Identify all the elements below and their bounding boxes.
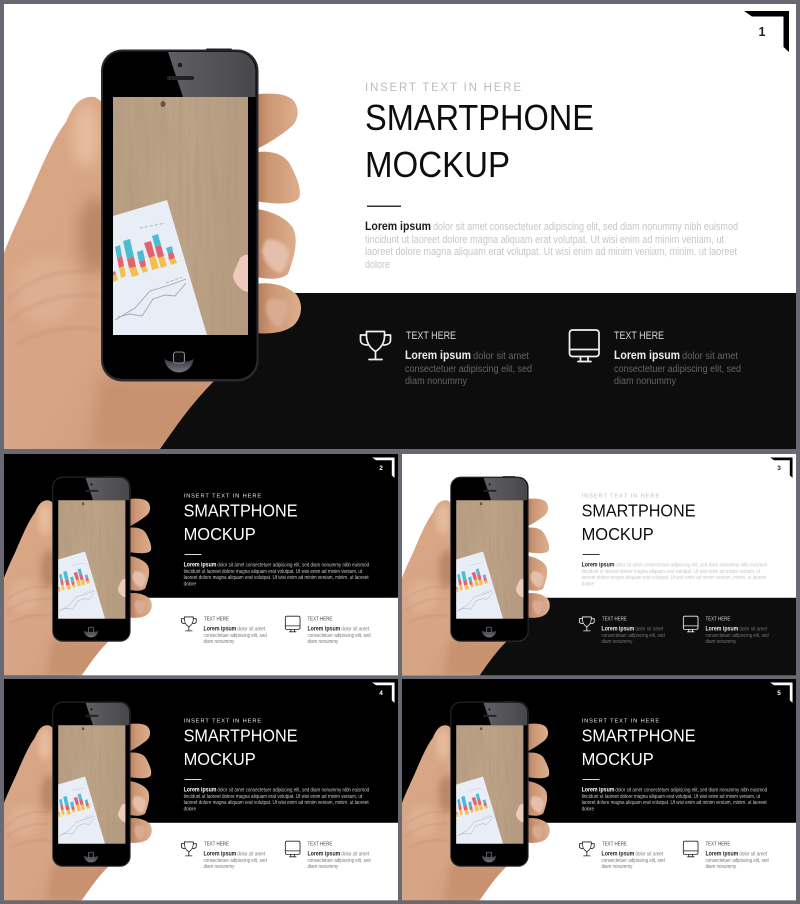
icon: trophy — [360, 332, 390, 360]
body text — [365, 219, 738, 271]
feature text 2 — [614, 330, 741, 387]
panel: slide 2 — [4, 454, 398, 675]
body text: tincidunt ut laoreet dolore magna aliquam erat volutpat. Ut wisi enim ad minim veniam, ut — [582, 569, 761, 575]
body text: laoreet dolore magna aliquam erat volutpat. Ut wisi enim ad minim veniam, minim. ut laoreet — [184, 800, 369, 806]
title: MOCKUP — [184, 749, 256, 769]
body text: laoreet dolore magna aliquam erat volutpat. Ut wisi enim ad minim veniam, minim. ut laoreet — [365, 246, 737, 258]
image: hand holding smartphone — [402, 701, 550, 900]
feature text 1: Lorem ipsum — [203, 627, 236, 633]
feature text 1: TEXT HERE — [406, 330, 456, 342]
feature text 2: consectetuer adipiscing elit, sed — [705, 633, 769, 639]
body text: dolor sit amet consectetuer adipiscing elit, sed diam nonummy nibh euismod — [433, 221, 738, 233]
body text: tincidunt ut laoreet dolore magna aliquam erat volutpat. Ut wisi enim ad minim veniam, ut — [184, 569, 363, 575]
panel: slide 4 — [4, 679, 398, 900]
body text: dolore — [184, 806, 196, 812]
feature text 1 — [601, 617, 665, 645]
page number corner — [372, 682, 395, 703]
divider — [583, 778, 600, 781]
body text: dolore — [365, 259, 390, 271]
feature text 1: TEXT HERE — [204, 617, 229, 623]
page number corner — [770, 457, 793, 478]
dark band — [150, 293, 796, 449]
body text: Lorem ipsum — [582, 787, 614, 793]
feature text 1: diam nonummy — [601, 864, 633, 870]
feature text 1: dolor sit amet — [635, 627, 664, 633]
page number corner: 4 — [379, 690, 383, 697]
body text: dolor sit amet consectetuer adipiscing elit, sed diam nonummy nibh euismod — [217, 787, 369, 793]
feature text 1: diam nonummy — [405, 375, 468, 387]
feature text 1: Lorem ipsum — [203, 852, 236, 858]
panel: slide 1 — [4, 4, 796, 449]
feature text 2: Lorem ipsum — [705, 852, 738, 858]
body text — [184, 562, 369, 587]
feature text 1: diam nonummy — [601, 639, 633, 645]
title: MOCKUP — [365, 144, 510, 185]
image: hand holding smartphone — [4, 476, 152, 675]
body text: dolor sit amet consectetuer adipiscing elit, sed diam nonummy nibh euismod — [615, 787, 767, 793]
light band — [77, 598, 398, 675]
page number corner: 1 — [759, 25, 766, 39]
icon: monitor — [683, 616, 698, 632]
body text: Lorem ipsum — [184, 562, 216, 568]
feature text 2: diam nonummy — [705, 864, 737, 870]
page number corner — [372, 457, 395, 478]
feature text 2: dolor sit amet — [341, 852, 370, 858]
light band — [77, 823, 398, 900]
body text: dolore — [582, 581, 594, 587]
icon: monitor — [683, 841, 698, 857]
title: MOCKUP — [582, 749, 654, 769]
title: SMARTPHONE — [582, 726, 696, 746]
title: MOCKUP — [582, 524, 654, 544]
feature text 1: consectetuer adipiscing elit, sed — [405, 363, 532, 375]
panel: slide 5 — [402, 679, 796, 900]
feature text 1: diam nonummy — [203, 639, 235, 645]
feature text 1: dolor sit amet — [237, 852, 266, 858]
divider — [583, 553, 600, 556]
icon: trophy — [181, 617, 196, 631]
body text: Lorem ipsum — [365, 219, 431, 233]
page number corner: 3 — [777, 465, 781, 472]
feature text 2: consectetuer adipiscing elit, sed — [705, 858, 769, 864]
feature text 1 — [203, 617, 267, 645]
feature text 1: dolor sit amet — [237, 627, 266, 633]
feature text 2 — [705, 617, 769, 645]
feature text 2: TEXT HERE — [307, 842, 333, 848]
body text: Lorem ipsum — [582, 562, 614, 568]
title — [184, 501, 298, 544]
page number corner — [744, 11, 789, 52]
subtitle: INSERT TEXT IN HERE — [582, 493, 659, 499]
feature text 2 — [307, 617, 371, 645]
feature text 2: Lorem ipsum — [614, 348, 680, 362]
feature text 2: Lorem ipsum — [307, 627, 340, 633]
feature text 1: Lorem ipsum — [405, 348, 471, 362]
feature text 1: dolor sit amet — [473, 350, 529, 362]
title: MOCKUP — [184, 524, 256, 544]
feature text 1: Lorem ipsum — [601, 627, 634, 633]
divider — [367, 206, 401, 207]
body text: tincidunt ut laoreet dolore magna aliquam erat volutpat. Ut wisi enim ad minim veniam, ut — [184, 794, 363, 800]
page number corner — [770, 682, 793, 703]
feature text 2: diam nonummy — [307, 864, 339, 870]
feature text 1: dolor sit amet — [635, 852, 664, 858]
feature text 1: TEXT HERE — [602, 842, 627, 848]
subtitle: INSERT TEXT IN HERE — [184, 493, 261, 499]
feature text 2: dolor sit amet — [682, 350, 738, 362]
body text: laoreet dolore magna aliquam erat volutpat. Ut wisi enim ad minim veniam, minim. ut laoreet — [582, 575, 767, 581]
title — [365, 97, 594, 185]
icon: trophy — [579, 617, 594, 631]
icon: monitor — [285, 616, 300, 632]
icon: trophy — [579, 842, 594, 856]
page number corner: 2 — [379, 465, 383, 472]
feature text 2: dolor sit amet — [739, 627, 768, 633]
image: hand holding smartphone — [402, 476, 550, 675]
feature text 2 — [307, 842, 371, 870]
title: SMARTPHONE — [184, 726, 298, 746]
subtitle: INSERT TEXT IN HERE — [365, 82, 521, 94]
feature text 1 — [601, 842, 665, 870]
feature text 2: diam nonummy — [614, 375, 677, 387]
feature text 2 — [705, 842, 769, 870]
page number corner: 5 — [777, 690, 781, 697]
image: hand holding smartphone — [4, 701, 152, 900]
title: SMARTPHONE — [184, 501, 298, 521]
image: hand holding smartphone — [4, 48, 301, 449]
feature text 1 — [405, 330, 532, 387]
feature text 1 — [203, 842, 267, 870]
icon: monitor — [285, 841, 300, 857]
title — [184, 726, 298, 769]
feature text 1: TEXT HERE — [602, 617, 627, 623]
feature text 2: TEXT HERE — [705, 842, 731, 848]
divider — [185, 553, 202, 556]
body text: dolore — [184, 581, 196, 587]
body text: tincidunt ut laoreet dolore magna aliquam erat volutpat. Ut wisi enim ad minim veniam, ut — [582, 794, 761, 800]
body text: dolor sit amet consectetuer adipiscing elit, sed diam nonummy nibh euismod — [615, 562, 767, 568]
title — [582, 726, 696, 769]
body text: Lorem ipsum — [184, 787, 216, 793]
feature text 2: TEXT HERE — [307, 617, 333, 623]
feature text 2: diam nonummy — [705, 639, 737, 645]
feature text 1: Lorem ipsum — [601, 852, 634, 858]
body text: laoreet dolore magna aliquam erat volutpat. Ut wisi enim ad minim veniam, minim. ut laoreet — [184, 575, 369, 581]
feature text 1: TEXT HERE — [204, 842, 229, 848]
body text — [582, 787, 767, 812]
feature text 1: consectetuer adipiscing elit, sed — [203, 858, 267, 864]
feature text 1: consectetuer adipiscing elit, sed — [203, 633, 267, 639]
feature text 2: dolor sit amet — [341, 627, 370, 633]
body text: tincidunt ut laoreet dolore magna aliquam erat volutpat. Ut wisi enim ad minim veniam, ut — [365, 234, 724, 246]
subtitle: INSERT TEXT IN HERE — [184, 718, 261, 724]
title — [582, 501, 696, 544]
feature text 2: consectetuer adipiscing elit, sed — [614, 363, 741, 375]
feature text 2: diam nonummy — [307, 639, 339, 645]
feature text 1: consectetuer adipiscing elit, sed — [601, 633, 665, 639]
title: SMARTPHONE — [582, 501, 696, 521]
feature text 2: consectetuer adipiscing elit, sed — [307, 858, 371, 864]
feature text 2: TEXT HERE — [705, 617, 731, 623]
feature text 2: consectetuer adipiscing elit, sed — [307, 633, 371, 639]
subtitle: INSERT TEXT IN HERE — [582, 718, 659, 724]
light band — [475, 823, 796, 900]
title: SMARTPHONE — [365, 97, 594, 138]
body text: dolor sit amet consectetuer adipiscing elit, sed diam nonummy nibh euismod — [217, 562, 369, 568]
body text: laoreet dolore magna aliquam erat volutpat. Ut wisi enim ad minim veniam, minim. ut laoreet — [582, 800, 767, 806]
body text — [582, 562, 767, 587]
feature text 2: Lorem ipsum — [705, 627, 738, 633]
dark band — [475, 598, 796, 675]
feature text 1: diam nonummy — [203, 864, 235, 870]
divider — [185, 778, 202, 781]
icon: trophy — [181, 842, 196, 856]
body text: dolore — [582, 806, 594, 812]
panel: slide 3 — [402, 454, 796, 675]
feature text 1: consectetuer adipiscing elit, sed — [601, 858, 665, 864]
body text — [184, 787, 369, 812]
feature text 2: dolor sit amet — [739, 852, 768, 858]
feature text 2: Lorem ipsum — [307, 852, 340, 858]
icon: monitor — [570, 330, 599, 362]
feature text 2: TEXT HERE — [614, 330, 664, 342]
